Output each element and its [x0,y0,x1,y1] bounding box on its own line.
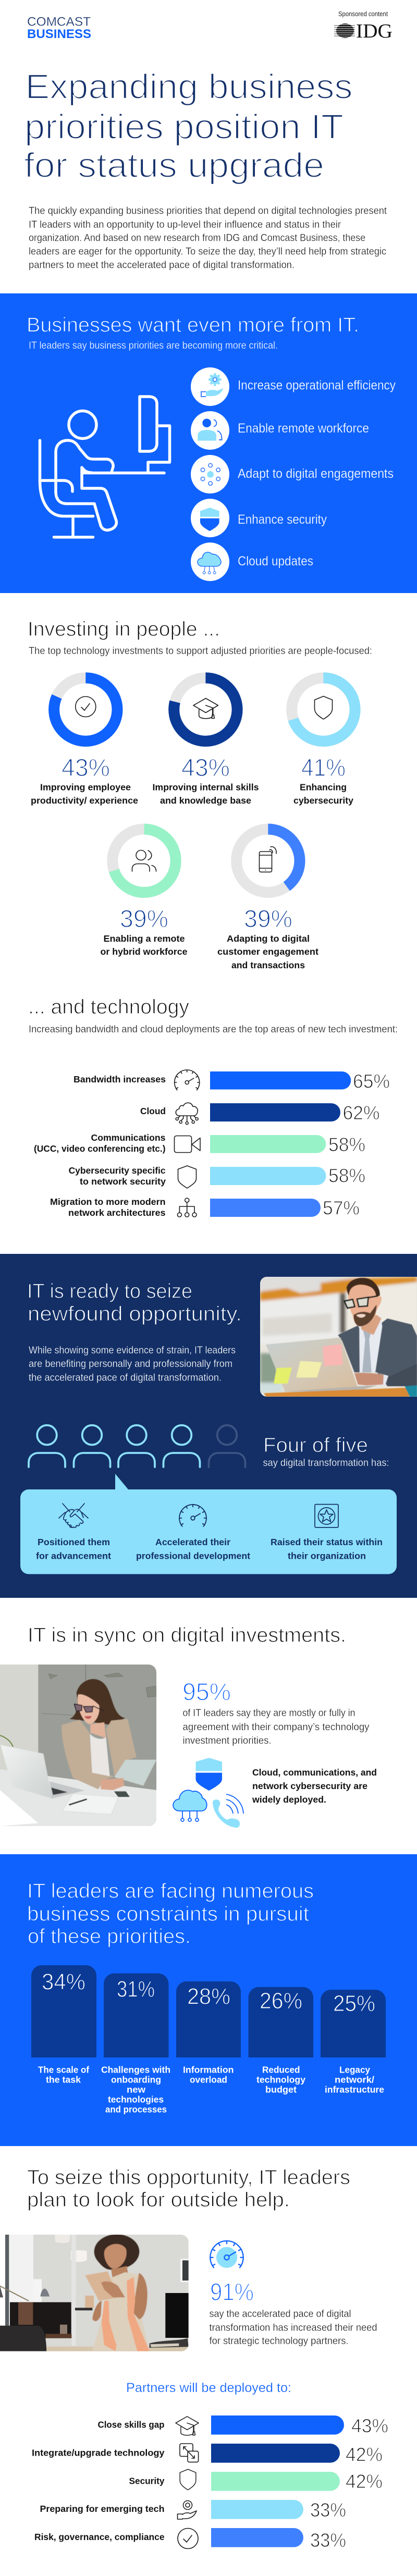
row: security 42% [129,2469,383,2492]
row: network architectures 57%: network architectures [68,1207,166,1218]
bar: information overload 28%: overload [190,2075,227,2085]
donut chart: cybersecurity 41%: Enhancing [300,782,347,792]
bar chart: technology investment [34,1070,390,1218]
text block: widely deployed: Cloud, communications, and [252,1767,377,1778]
icon: remote worker [198,418,222,441]
donut chart: employee productivity 43%: productivity/ experience [31,795,138,806]
stat: 95 percent [182,1678,370,1746]
icon: gear in hand [201,373,223,397]
header: sponsored content IDG logo: IDG [356,20,393,42]
header: Comcast Business logo: COMCAST [27,15,91,29]
icon: shield, cloud and phone [173,1758,243,1828]
callout: digital transformation outcomes [20,1474,397,1574]
stat: four of five: say digital transformation has: [263,1458,389,1469]
stat: 91 percent: say the accelerated pace of digital [210,2309,351,2320]
donut chart: digital customer engagement 39%: and transactions [231,960,305,970]
subheading: tech investment: Increasing bandwidth and cloud deployments are the top areas of new tech investment: [29,1024,398,1035]
text block: widely deployed: widely deployed. [252,1794,326,1805]
photo: woman with tablet [0,2234,189,2351]
stat: four of five: Four of five [263,1434,368,1457]
bar: onboarding challenges 31%: 31% [117,1977,155,2002]
subheading: people investments: The top technology investments to support adjusted priorities are people-focused: [29,646,372,657]
bar: information overload 28%: 28% [187,1983,230,2010]
row: close skills gap 43% [98,2415,388,2437]
outcome: accelerated development [136,1505,250,1561]
title: Expanding business [25,67,352,106]
row: communications 58%: (UCC, video conferencing etc.) [34,1143,166,1154]
bar: reduced technology budget 26% [248,1987,313,2095]
stat: 95 percent: agreement with their company’s technology [182,1722,370,1733]
panel: business constraints [0,1854,417,2146]
bar: the scale of the task 34%: 34% [42,1969,85,1994]
icon: cloud [198,552,221,574]
text block: benefiting personally: While showing some evidence of strain, IT leaders [29,1345,236,1356]
bar: onboarding challenges 31%: new [127,2085,145,2095]
bar: the scale of the task 34%: The scale of [38,2065,89,2075]
donut chart: internal skills 43%: 43% [181,754,230,781]
photo: woman with laptop and tablet [0,1665,156,1826]
text block: benefiting personally [29,1345,236,1383]
subheading: IT leaders say business priorities are becoming more critical. [29,340,278,351]
heading: business constraints [27,1880,314,1948]
outcome: positioned for advancement: for advancement [36,1551,111,1561]
outcome: accelerated development: Accelerated their [155,1537,230,1547]
text block: widely deployed: network cybersecurity are [252,1781,367,1791]
donut chart: remote workforce 39% [100,829,188,957]
row: close skills gap 43%: 43% [351,2415,388,2437]
heading: outside help: To seize this opportunity, IT leaders [27,2166,350,2189]
stat: 95 percent: investment priorities. [182,1735,271,1746]
icon: person at computer [40,397,170,537]
row: bandwidth increases 65%: 65% [353,1070,390,1092]
photo: man at laptop [260,1277,417,1397]
intro paragraph: leaders are eager for the opportunity. To seize the day, they’ll need help from strategic [29,246,386,257]
row: communications 58% [34,1132,365,1155]
donut chart: digital customer engagement 39%: Adapting to digital [227,933,310,944]
donut chart: digital customer engagement 39%: customer engagement [217,946,318,957]
row: preparing for emerging tech 33%: 33% [310,2499,346,2521]
donut chart: internal skills 43%: and knowledge base [160,795,251,806]
row: communications 58%: 58% [328,1134,365,1155]
heading: business constraints: business constraints in pursuit [27,1903,309,1925]
title: for status upgrade [24,146,324,185]
header: Comcast Business logo [27,15,91,41]
text block: benefiting personally: the accelerated pace of digital transformation. [29,1373,222,1383]
stat: 91 percent: for strategic technology partners. [210,2336,348,2347]
outcome: raised status: Raised their status within [271,1537,383,1547]
text block: widely deployed [252,1767,377,1805]
heading: business constraints: IT leaders are facing numerous [27,1880,314,1902]
donut chart: digital customer engagement 39%: 39% [244,905,292,932]
heading: partners will be deployed: Partners will be deployed to: [126,2381,291,2395]
row: cloud 62%: Cloud [140,1106,166,1116]
stat: four of five [263,1434,389,1469]
row: cybersecurity 58%: 58% [328,1165,365,1186]
row: cybersecurity 58%: to network security [80,1176,166,1187]
bar: legacy infrastructure 25%: network/ [335,2075,374,2085]
donut chart: employee productivity 43% [31,678,138,806]
bar: onboarding challenges 31% [101,1974,170,2115]
title [24,67,352,185]
donut chart: internal skills 43%: Improving internal skills [152,782,259,792]
bar: reduced technology budget 26%: technology [256,2075,305,2085]
icon: gauge [210,2241,243,2268]
panel: IT is ready [0,1254,417,1598]
donut chart: remote workforce 39%: or hybrid workforce [100,946,188,957]
bar: reduced technology budget 26%: Reduced [262,2065,300,2075]
outcome: raised status: their organization [288,1551,366,1561]
row: preparing for emerging tech 33%: Preparing for emerging tech [40,2504,165,2514]
row: cloud 62%: 62% [343,1102,379,1124]
donut chart: remote workforce 39%: 39% [120,905,168,932]
bar: legacy infrastructure 25%: infrastructure [325,2085,384,2095]
heading: and technology: ... and technology [28,996,190,1018]
heading: IT is ready to seize newfound opportunity: IT is ready to seize [27,1280,192,1303]
bar: onboarding challenges 31%: technologies [108,2094,164,2104]
list labels: Adapt to digital engagements [238,466,394,481]
bar: legacy infrastructure 25%: 25% [333,1991,375,2016]
row: network architectures 57%: Migration to more modern [50,1197,166,1207]
donut chart: employee productivity 43%: 43% [62,754,110,781]
bar: the scale of the task 34% [31,1965,96,2085]
panel: businesses want more [0,293,417,593]
heading: IT is in sync: IT is in sync on digital investments. [28,1624,346,1647]
icon: security shield [200,508,219,531]
stat: 91 percent: 91% [210,2278,254,2306]
heading: IT is ready to seize newfound opportunity: newfound opportunity. [28,1303,242,1325]
heading: businesses want even more from IT: Businesses want even more from IT. [27,314,359,337]
row: risk, governance, compliance 33%: Risk, governance, compliance [34,2532,165,2542]
outcome: accelerated development: professional development [136,1551,250,1561]
bar: reduced technology budget 26%: 26% [260,1988,302,2014]
row: risk, governance, compliance 33%: 33% [310,2530,346,2551]
heading: business constraints: of these priorities. [28,1925,191,1948]
donut chart: digital customer engagement 39% [217,829,318,970]
row: network architectures 57% [50,1197,360,1218]
row: integrate/upgrade technology 42% [32,2444,383,2465]
intro paragraph: partners to meet the accelerated pace of digital transformation. [29,260,295,271]
list: priorities with icons [191,367,396,581]
row: bandwidth increases 65%: Bandwidth increases [73,1074,166,1084]
row: cloud 62% [140,1102,379,1125]
stat: 91 percent [210,2278,377,2347]
bar: onboarding challenges 31%: Challenges with [101,2065,170,2075]
row: integrate/upgrade technology 42%: 42% [346,2444,383,2465]
row: risk, governance, compliance 33% [34,2528,346,2551]
donut chart: internal skills 43% [152,678,259,806]
outcome: positioned for advancement: Positioned them [38,1537,110,1547]
title: priorities position IT [24,107,344,146]
stat: 91 percent: transformation has increased their need [210,2322,377,2334]
stat: 95 percent: 95% [182,1678,231,1706]
text block: benefiting personally: are benefiting personally and professionally from [29,1359,232,1370]
bar: information overload 28%: Information [183,2065,234,2075]
row: security 42%: 42% [346,2471,383,2492]
row: cybersecurity 58%: Cybersecurity specific [69,1165,166,1176]
bar: reduced technology budget 26%: budget [265,2085,297,2095]
donut chart: employee productivity 43%: Improving employee [40,782,131,792]
row: communications 58%: Communications [91,1132,166,1143]
header: sponsored content IDG logo [334,10,393,42]
heading: outside help [27,2166,350,2211]
bar: the scale of the task 34%: the task [46,2075,81,2085]
heading: outside help: plan to look for outside help. [27,2189,290,2211]
stat: 95 percent: of IT leaders say they are mostly or fully in [182,1708,355,1719]
header: sponsored content IDG logo: Sponsored content [338,10,388,18]
donut chart: remote workforce 39%: Enabling a remote [103,933,185,944]
row: security 42%: Security [129,2476,165,2486]
outcome: raised status [271,1505,383,1561]
heading: investing in people: Investing in people ... [28,618,220,640]
intro paragraph: IT leaders with an opportunity to up-level their influence and status in their [29,219,341,230]
pictogram: four of five people [29,1425,245,1467]
donut chart: cybersecurity 41%: cybersecurity [293,795,353,806]
list labels: Enhance security [238,512,327,527]
list labels: Enable remote workforce [238,421,369,436]
intro paragraph: organization. And based on new research from IDG and Comcast Business, these [29,232,365,244]
bar: legacy infrastructure 25%: Legacy [339,2065,370,2075]
heading: IT is ready to seize newfound opportunity [27,1280,242,1325]
list labels [238,378,396,569]
intro paragraph: The quickly expanding business priorities that depend on digital technologies present [29,206,387,217]
intro paragraph [29,206,387,271]
outcome: positioned for advancement [36,1503,111,1561]
bar: information overload 28% [176,1981,241,2085]
row: integrate/upgrade technology 42%: Integrate/upgrade technology [32,2447,165,2458]
row: bandwidth increases 65% [73,1070,390,1092]
row: close skills gap 43%: Close skills gap [98,2419,165,2430]
donut chart: cybersecurity 41%: 41% [301,754,346,781]
list labels: Cloud updates [238,554,313,569]
header: Comcast Business logo: BUSINESS [27,27,91,41]
row: network architectures 57%: 57% [323,1198,360,1218]
bar chart: partners [32,2415,388,2551]
bar: onboarding challenges 31%: onboarding [111,2075,161,2085]
bar: onboarding challenges 31%: and processes [105,2104,167,2115]
row: cybersecurity 58% [69,1165,365,1188]
row: preparing for emerging tech 33% [40,2499,346,2521]
list labels: Increase operational efficiency [238,378,396,393]
donut chart: cybersecurity 41% [292,678,355,806]
icon: digital engagement nodes [201,463,220,485]
bar: legacy infrastructure 25% [321,1990,386,2095]
